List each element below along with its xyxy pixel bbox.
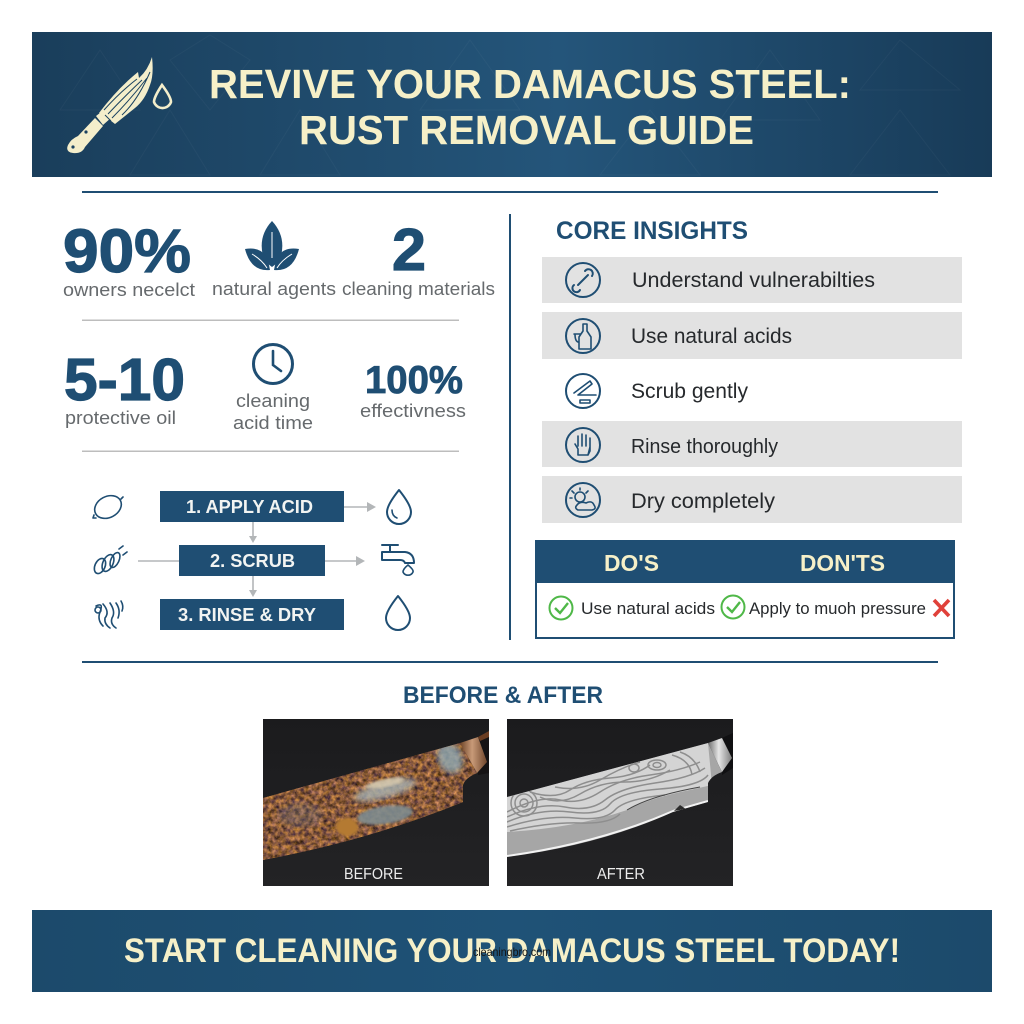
insight row: rinse thoroughly: Rinse thoroughly <box>631 435 779 458</box>
panel: key statistics <box>63 217 495 433</box>
panel: process flow <box>91 490 414 630</box>
stat: cleaning acid time <box>233 344 313 433</box>
arrow: step 1 to drop <box>344 502 376 512</box>
insight row: understand vulnerabilities: Understand vulnerabilties <box>632 269 875 292</box>
footer banner <box>32 910 992 992</box>
stat: natural agents: natural agents <box>212 279 336 299</box>
insight row: use natural acids <box>542 312 962 359</box>
insight row: scrub gently <box>566 374 748 408</box>
heading: do's: DO'S <box>604 550 659 576</box>
watermark: cleaningbro.com <box>473 945 551 959</box>
arrow: step 1 to step 2 <box>249 522 257 543</box>
step 3: 3. RINSE & DRY <box>178 605 316 625</box>
panel: do's and don'ts <box>535 540 955 638</box>
stat: 2 cleaning materials: cleaning materials <box>342 279 495 299</box>
call to action: START CLEANING YOUR DAMACUS STEEL TODAY! <box>124 932 900 970</box>
stat: 2 cleaning materials <box>342 217 495 299</box>
don't text: Apply to muoh pressure <box>749 599 926 618</box>
header banner <box>32 32 992 177</box>
step 1 <box>160 491 344 522</box>
insight row: understand vulnerabilities <box>542 257 962 303</box>
stat: 90% owners: owners necelct <box>63 280 195 300</box>
icon: rinse drop <box>386 596 410 630</box>
stat: natural agents <box>212 221 336 299</box>
arrow: step 2 to tap <box>325 556 365 566</box>
step 1: 1. APPLY ACID <box>186 497 313 517</box>
panel: core insights <box>542 217 962 523</box>
icon: water drop <box>154 85 171 108</box>
stat: 5-10 protective oil: 5-10 <box>64 347 185 413</box>
step 2: 2. SCRUB <box>210 551 295 571</box>
arrow: scrubber to step 2 <box>138 560 179 562</box>
stat: 100% effectiveness: effectivness <box>360 400 466 421</box>
heading: don'ts: DON'TS <box>800 550 885 576</box>
icon: damascus knife <box>67 57 153 153</box>
insight row: scrub gently: Scrub gently <box>631 380 748 403</box>
stat: 100% effectiveness: 100% <box>365 359 463 402</box>
step 3 <box>160 599 344 630</box>
title <box>209 61 851 153</box>
title: RUST REMOVAL GUIDE <box>299 107 754 153</box>
icon: lemon <box>91 491 125 523</box>
step 2 <box>179 545 325 576</box>
do text: Use natural acids <box>581 599 715 618</box>
insight row: rinse thoroughly <box>542 421 962 467</box>
stat: 2 cleaning materials: 2 <box>392 217 426 283</box>
photo: clean damascus knife after: AFTER <box>597 866 645 883</box>
heading: before & after: BEFORE & AFTER <box>403 682 603 709</box>
heading: core insights: CORE INSIGHTS <box>556 217 748 245</box>
stat: 90% owners: 90% <box>63 217 191 285</box>
photo: clean damascus knife after <box>507 719 733 886</box>
title: REVIVE YOUR DAMACUS STEEL: <box>209 61 851 107</box>
insight row: dry completely: Dry completely <box>631 490 776 513</box>
icon: red cross <box>934 600 949 616</box>
icon: check 1 <box>550 596 572 620</box>
stat: cleaning acid time: cleaning <box>236 390 310 411</box>
stat: 100% effectiveness <box>360 359 466 421</box>
photo: rusty knife before <box>263 719 489 886</box>
icon: rinse waves <box>95 601 123 628</box>
stat: 5-10 protective oil: protective oil <box>65 408 176 428</box>
insight row: use natural acids: Use natural acids <box>631 325 792 348</box>
arrow: step 2 to step 3 <box>249 576 257 597</box>
icon: acid drop <box>387 490 411 524</box>
icon: scrubber <box>92 546 127 575</box>
insight row: dry completely <box>542 476 962 523</box>
icon: check 2 <box>722 596 744 618</box>
stat: cleaning acid time: acid time <box>233 412 313 433</box>
photo: rusty knife before: BEFORE <box>344 866 403 883</box>
icon: tap <box>382 545 414 575</box>
